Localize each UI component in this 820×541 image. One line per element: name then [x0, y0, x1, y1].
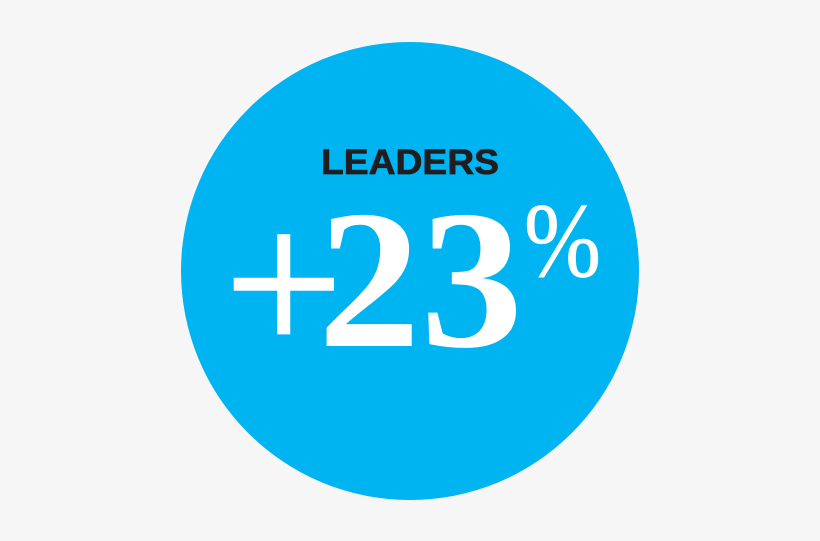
- value: +23%: [224, 168, 601, 400]
- percent sign: %: [524, 182, 601, 299]
- blue circle: [181, 42, 639, 500]
- digits 23: 23: [318, 170, 523, 389]
- plus sign: +: [224, 168, 343, 400]
- label: LEADERS: LEADERS: [321, 143, 499, 182]
